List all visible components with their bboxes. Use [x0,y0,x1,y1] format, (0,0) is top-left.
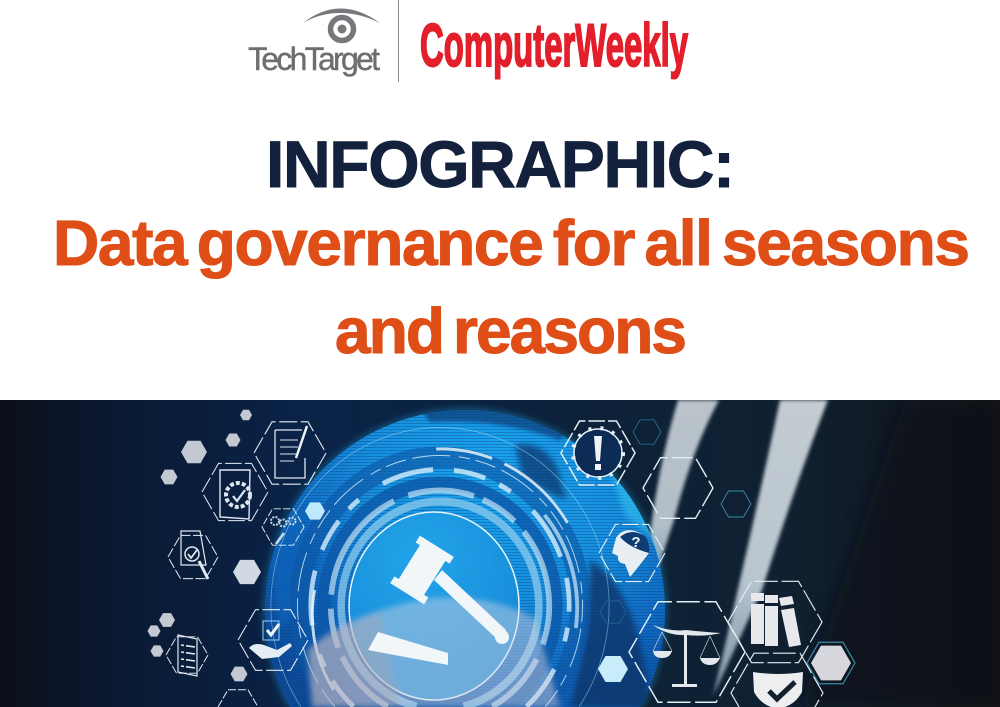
icon: hand with checkmark [249,621,292,659]
shirt collar streaks [644,400,828,696]
title: Data governance for all seasons [53,207,970,279]
icon: head with question mark [612,530,649,577]
icon: gears [271,517,296,544]
icon: clipboard with pen [275,426,307,478]
title: and reasons [335,295,687,367]
logo: TechTarget: TechTarget [248,41,380,77]
icon: checklist [178,635,197,676]
icon: warning gear [573,428,623,478]
icon: head with question mark: ? [631,534,641,551]
hexagon network, right [561,420,855,707]
icon: shield with checkmark [753,672,803,707]
concentric rings [271,428,609,706]
translucent hand overlay [308,597,560,707]
logo: TechTarget [248,8,380,77]
photo banner: digital law globe [0,400,1000,707]
globe [260,406,680,707]
icon: gavel [368,536,509,665]
inner circle [349,512,519,700]
logo: Computer Weekly: ComputerWeekly [420,12,688,79]
icon: books [751,593,801,647]
title: INFOGRAPHIC: [266,127,735,201]
icon: document with magnifier [181,531,208,579]
icon: scales of justice [653,625,721,687]
hexagon network, left [148,410,325,681]
icon: clipboard with gear check [220,470,250,519]
title [53,127,970,367]
